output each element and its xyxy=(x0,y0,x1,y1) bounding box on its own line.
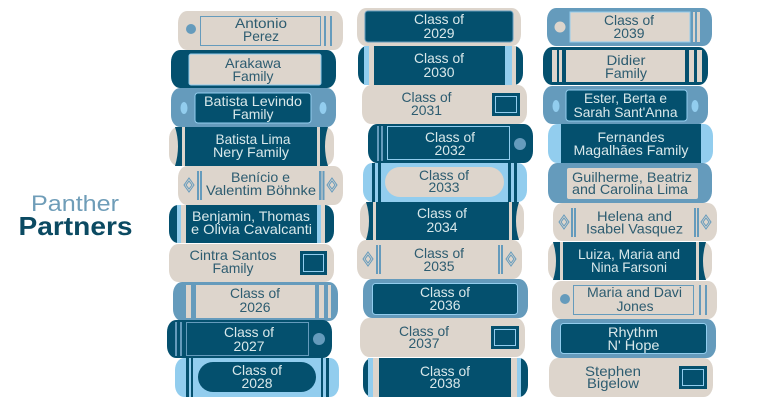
book: Cintra Santos Family xyxy=(169,244,334,282)
book: Class of 2033: Class of xyxy=(419,167,469,183)
book: Benjamin, Thomas e Olivia Cavalcanti: Benjamin, Thomas xyxy=(192,208,310,224)
book: Class of 2029: 2029 xyxy=(424,25,455,41)
book: Benjamin, Thomas e Olivia Cavalcanti xyxy=(169,205,334,243)
book: Rhythm N' Hope xyxy=(551,319,716,358)
book: Guilherme, Beatriz and Carolina Lima: and Carolina Lima xyxy=(572,181,688,197)
book: Didier Family xyxy=(543,47,708,85)
book: Class of 2036: 2036 xyxy=(430,297,461,313)
book: Maria and Davi Jones: Jones xyxy=(616,298,654,314)
book: Arakawa Family: Arakawa xyxy=(225,55,281,71)
book: Class of 2035: 2035 xyxy=(424,258,455,274)
book: Class of 2030 xyxy=(358,46,523,85)
book: Class of 2026: Class of xyxy=(230,285,280,301)
book: Class of 2034: 2034 xyxy=(426,219,458,235)
book: Batista Levindo Family: Batista Levindo xyxy=(204,93,302,109)
book: Helena and Isabel Vasquez: Helena and xyxy=(597,208,672,224)
book: Arakawa Family xyxy=(171,50,336,88)
book: Cintra Santos Family: Family xyxy=(212,260,254,276)
book: Class of 2034 xyxy=(360,202,524,240)
book: Class of 2033 xyxy=(363,163,527,202)
book: Batista Lima Nery Family: Batista Lima xyxy=(216,131,291,147)
book: Class of 2026 xyxy=(173,282,338,321)
book: Class of 2031 xyxy=(362,85,527,124)
book: Class of 2036: Class of xyxy=(420,284,470,300)
book: Class of 2032 xyxy=(368,124,533,163)
book: Class of 2026: 2026 xyxy=(240,299,271,315)
book: Cintra Santos Family: Cintra Santos xyxy=(190,247,276,263)
book: Benício e Valentim Böhnke: Valentim Böhnke xyxy=(206,182,316,198)
book: Fernandes Magalhães Family xyxy=(548,124,713,163)
book: Class of 2030: 2030 xyxy=(424,64,455,80)
book: Helena and Isabel Vasquez: Isabel Vasquez xyxy=(586,220,683,236)
title: Panther Partners: Panther xyxy=(31,191,119,216)
book: Class of 2037 xyxy=(360,318,525,357)
book: Arakawa Family: Family xyxy=(232,68,274,84)
book: Benjamin, Thomas e Olivia Cavalcanti: e Olivia Cavalcanti xyxy=(191,221,312,237)
book: Class of 2036 xyxy=(363,279,528,318)
book: Benício e Valentim Böhnke xyxy=(178,166,343,205)
book: Batista Levindo Family: Family xyxy=(232,106,274,122)
book: Class of 2037: Class of xyxy=(399,323,449,339)
book: Class of 2028 xyxy=(175,358,339,397)
book: Batista Lima Nery Family xyxy=(169,127,334,166)
book: Class of 2028: Class of xyxy=(232,362,282,378)
book: Class of 2028: 2028 xyxy=(242,375,273,391)
book: Class of 2027: 2027 xyxy=(234,338,265,354)
book: Class of 2035 xyxy=(357,240,522,279)
book: Maria and Davi Jones: Maria and Davi xyxy=(587,284,682,300)
book: Rhythm N' Hope: Rhythm xyxy=(608,324,658,340)
book: Helena and Isabel Vasquez xyxy=(553,203,717,241)
book: Class of 2038: 2038 xyxy=(430,375,461,391)
book: Fernandes Magalhães Family: Fernandes xyxy=(598,129,664,145)
book: Class of 2039: 2039 xyxy=(614,25,645,41)
title: Panther Partners: Partners xyxy=(18,211,132,241)
book: Class of 2038 xyxy=(363,358,528,397)
book: Class of 2030: Class of xyxy=(414,50,464,66)
book: Class of 2027 xyxy=(167,320,332,358)
book: Class of 2039 xyxy=(547,8,712,46)
book: Class of 2029 xyxy=(357,8,521,46)
book: Class of 2029: Class of xyxy=(414,11,464,27)
book: Luiza, Maria and Nina Farsoni: Nina Farsoni xyxy=(591,259,667,275)
book: Antonio Perez: Perez xyxy=(243,28,279,44)
book: Class of 2027: Class of xyxy=(224,324,274,340)
book: Guilherme, Beatriz and Carolina Lima: Guilherme, Beatriz xyxy=(572,169,692,185)
book: Didier Family: Family xyxy=(605,65,647,81)
book: Stephen Bigelow: Stephen xyxy=(585,363,641,379)
book: Batista Levindo Family xyxy=(171,88,336,127)
book: Class of 2034: Class of xyxy=(417,205,467,221)
book: Class of 2038: Class of xyxy=(420,363,470,379)
book: Class of 2032: Class of xyxy=(425,129,475,145)
book: Class of 2039: Class of xyxy=(604,12,654,28)
book: Benício e Valentim Böhnke: Benício e xyxy=(231,169,290,185)
book: Class of 2031: Class of xyxy=(402,89,452,105)
book: Luiza, Maria and Nina Farsoni: Luiza, Maria and xyxy=(578,246,680,262)
book: Batista Lima Nery Family: Nery Family xyxy=(213,144,289,160)
book: Antonio Perez xyxy=(178,11,343,50)
book: Ester, Berta e Sarah Sant'Anna xyxy=(543,86,708,124)
book: Guilherme, Beatriz and Carolina Lima xyxy=(548,163,712,203)
book: Class of 2033: 2033 xyxy=(428,179,460,195)
book: Didier Family: Didier xyxy=(606,52,646,68)
book: Luiza, Maria and Nina Farsoni xyxy=(548,242,712,280)
book: Stephen Bigelow xyxy=(549,358,713,397)
book: Class of 2035: Class of xyxy=(414,245,464,261)
book: Maria and Davi Jones xyxy=(552,281,717,319)
book: Class of 2031: 2031 xyxy=(411,102,442,118)
book: Ester, Berta e Sarah Sant'Anna: Ester, Berta e xyxy=(584,90,667,106)
book: Ester, Berta e Sarah Sant'Anna: Sarah Sant'Anna xyxy=(574,104,678,120)
title: Panther Partners xyxy=(18,191,132,241)
book: Fernandes Magalhães Family: Magalhães Family xyxy=(574,142,688,158)
book: Class of 2032: 2032 xyxy=(434,142,466,158)
book: Antonio Perez: Antonio xyxy=(235,15,287,31)
book: Stephen Bigelow: Bigelow xyxy=(587,375,640,391)
book: Class of 2037: 2037 xyxy=(408,335,440,351)
book: Rhythm N' Hope: N' Hope xyxy=(608,337,660,353)
